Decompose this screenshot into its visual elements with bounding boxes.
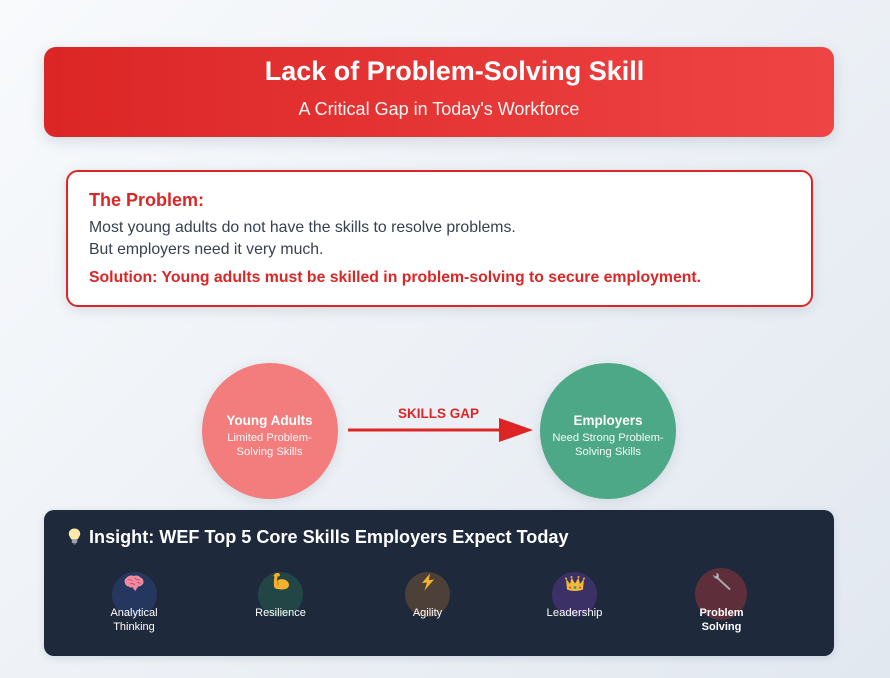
skill: resilience [255,572,306,619]
skill: agility [405,572,450,619]
circle: young adults [202,362,338,498]
icon: flexed arm [274,572,289,590]
problem solving label: Solving [702,620,741,632]
employers description: Need Strong Problem- [552,432,664,444]
agility circle [405,572,450,617]
icon: brain [124,576,144,591]
problem description: Most young adults do not have the skills to resolve problems. [89,218,516,236]
analytical thinking circle [112,572,156,617]
panel: insight [44,510,834,656]
problem description: But employers need it very much. [89,241,323,258]
young adults description: Limited Problem- [227,432,312,444]
leadership label: Leadership [547,607,602,619]
title: Lack of Problem-Solving Skill [265,56,644,86]
icon: lightning [422,574,434,590]
analytical thinking label: Thinking [113,620,155,632]
young adults description: Solving Skills [237,446,302,458]
resilience circle [258,572,303,617]
icon: light bulb [68,528,80,544]
arrow: young adults to employers [348,418,533,442]
skill: leadership [547,572,602,619]
analytical thinking label: Analytical [110,607,158,619]
icon: wrench [713,573,730,590]
problem description [89,218,516,258]
employers label: Employers [573,413,643,428]
analytical thinking label [110,607,158,632]
resilience label: Resilience [255,607,306,619]
label: skills gap: SKILLS GAP [398,406,479,421]
insight heading: Insight: WEF Top 5 Core Skills Employers Expect Today [89,527,568,547]
icon: crown [565,576,585,591]
solution statement: Solution: Young adults must be skilled in problem-solving to secure employment. [89,269,701,286]
panel: the problem [66,170,813,307]
skill: analytical thinking [110,572,158,632]
problem solving circle [695,568,747,620]
agility label: Agility [413,607,442,619]
header banner [44,46,834,136]
circle: employers [540,362,676,498]
young adults label: Young Adults [226,413,313,428]
problem solving label [699,607,744,632]
subtitle: A Critical Gap in Today's Workforce [299,98,579,118]
employers description: Solving Skills [575,446,641,458]
young adults description [227,432,312,458]
skill: problem solving [695,568,747,632]
problem heading: The Problem: [89,190,204,210]
problem solving label: Problem [699,607,744,619]
leadership circle [552,572,597,617]
employers description [552,432,664,458]
